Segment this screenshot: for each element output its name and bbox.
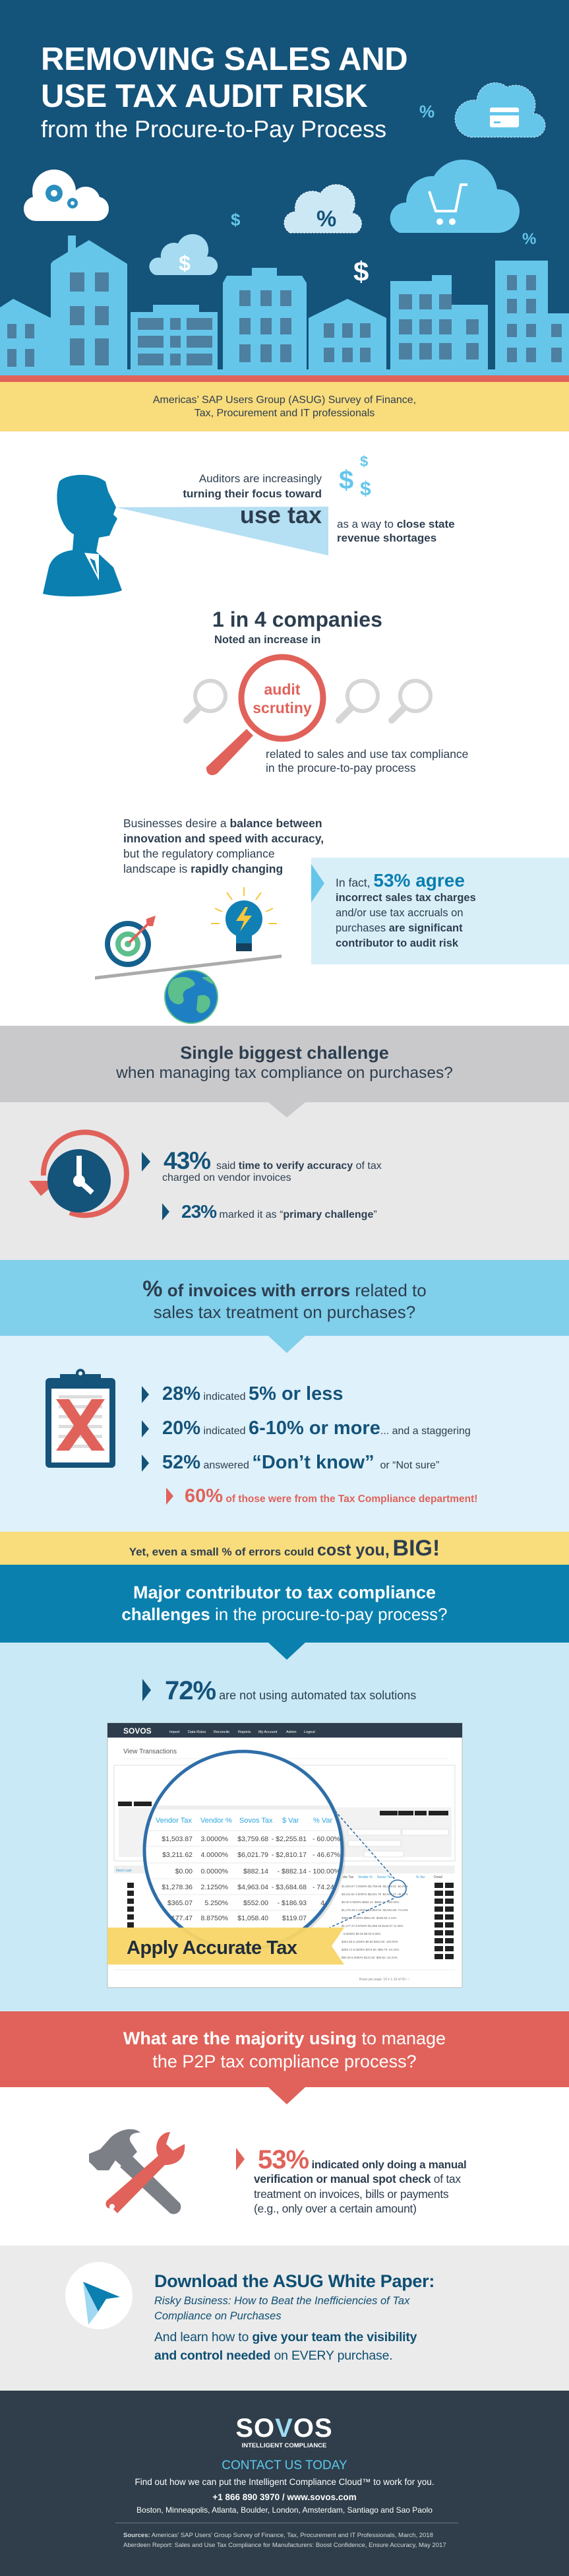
- panel: major contributor header: Major contributor to tax compliance: [133, 1583, 436, 1602]
- screenshot: Sovos view transactions: Detail: [434, 1875, 442, 1879]
- footer: [0, 2391, 569, 2576]
- icon: clouds and symbols: $: [231, 210, 241, 230]
- screenshot: Sovos view transactions: $1,177.47: [162, 1914, 193, 1922]
- screenshot: Sovos view transactions: Reconcile: [214, 1730, 229, 1734]
- screenshot: Sovos view transactions: $882.14: [243, 1868, 268, 1875]
- panel: major contributor header: [0, 1565, 569, 1643]
- panel: single biggest challenge header: [0, 1026, 569, 1102]
- screenshot: Sovos view transactions: $1,278.36: [162, 1883, 193, 1891]
- panel: single biggest challenge header: Single biggest challenge: [180, 1043, 389, 1063]
- survey band: [0, 382, 569, 431]
- text: businesses desire balance: but the regulatory compliance: [123, 847, 275, 860]
- icon: clouds and symbols: $: [179, 251, 191, 275]
- stat: 43%: charged on vendor invoices: [162, 1172, 291, 1183]
- survey band: Americas’ SAP Users Group (ASUG) Survey of Finance,: [153, 394, 416, 406]
- callout: 53% agree: incorrect sales tax charges: [336, 892, 476, 904]
- screenshot: Sovos view transactions: $3,759.68: [237, 1835, 268, 1843]
- screenshot: Sovos view transactions: % Var: [416, 1875, 425, 1879]
- screenshot: Sovos view transactions: dor Tax: [343, 1875, 354, 1879]
- screenshot: Sovos view transactions: $283.71 6.2500% $374.50 -$90.79 -24.24%: [342, 1948, 399, 1951]
- stat: 53% manual verification: 53% indicated only doing a manual: [258, 2145, 466, 2174]
- icon: clouds and symbols: $: [353, 256, 369, 287]
- screenshot: Sovos view transactions: $0.00 0.0000% $882.14 -$882.14 -100.00%: [342, 1901, 399, 1904]
- title: from the Procure-to-Pay Process: [41, 115, 386, 142]
- screenshot: Sovos view transactions: $1,503.87: [162, 1835, 193, 1843]
- icon: dollar signs: $: [360, 453, 368, 470]
- icon: clipboard with X: [45, 1369, 115, 1468]
- panel: invoice errors header: [0, 1260, 569, 1336]
- screenshot: Sovos view transactions: - $2,255.81: [272, 1835, 307, 1843]
- panel: challenge body: [0, 1102, 569, 1260]
- screenshot: Sovos view transactions: View Transactions: [123, 1748, 177, 1755]
- stat: 53% manual verification: (e.g., only over a certain amount): [254, 2202, 417, 2215]
- screenshot: Sovos view transactions: Sovos Tax: [377, 1875, 392, 1879]
- panel: download white paper: And learn how to give your team the visibility: [154, 2330, 417, 2344]
- screenshot: Sovos view transactions: - $882.14: [278, 1868, 307, 1875]
- callout: 53% agree: contributor to audit risk: [336, 937, 458, 949]
- text: related to sales and use tax: [266, 747, 468, 774]
- text: businesses desire balance: Businesses desire a balance between: [123, 817, 322, 830]
- panel: major contributor header: challenges in the procure-to-pay process?: [121, 1604, 448, 1624]
- title: USE TAX AUDIT RISK: [41, 79, 368, 114]
- list: error stats: 28% indicated 5% or less: [162, 1383, 343, 1404]
- icon: auditor silhouette with beam: [43, 475, 328, 596]
- text: related to sales and use tax: in the procure-to-pay process: [266, 761, 416, 774]
- icon: clock: [29, 1129, 129, 1218]
- sources: Aberdeen Report: Sales and Use Tax Compliance for Manufacturers: Boost Confidence, Ensure Accuracy, May 2017: [123, 2542, 446, 2549]
- list: error stats: 20% indicated 6-10% or more... and a staggering: [162, 1418, 471, 1439]
- red stripe: [0, 375, 569, 382]
- stat: 43%: 43% said time to verify accuracy of tax: [164, 1147, 382, 1174]
- screenshot: Sovos view transactions: $3,211.62 4.0000% $6,021.79 -$2,810.17 -46.67%: [342, 1893, 408, 1896]
- screenshot: Sovos view transactions: Vendor %: [200, 1817, 232, 1825]
- panel: majority using header: the P2P tax compliance process?: [152, 2052, 417, 2071]
- panel: majority using header: [0, 2011, 569, 2087]
- screenshot: Sovos view transactions: - $3,684.68: [272, 1883, 307, 1891]
- panel: download white paper: Compliance on Purchases: [154, 2310, 282, 2322]
- stat: 53% manual verification: treatment on invoices, bills or payments: [254, 2187, 448, 2201]
- panel: single biggest challenge header: when managing tax compliance on purchases?: [116, 1064, 453, 1082]
- stat: 43%: 23% marked it as “primary challenge”: [181, 1201, 377, 1222]
- callout: 53% agree: purchases are significant: [336, 922, 463, 934]
- icon: dollar signs: $: [339, 466, 353, 495]
- screenshot: Sovos view transactions: $119.07: [282, 1914, 307, 1922]
- text: related to sales and use tax: related to sales and use tax compliance: [266, 747, 468, 761]
- screenshot: Sovos view transactions: 11.25%: [317, 1914, 340, 1922]
- icon: audit scrutiny magnifiers: [183, 654, 433, 775]
- screenshot: Sovos view transactions: - 100.00%: [309, 1868, 340, 1875]
- screenshot: Sovos view transactions: 5.250%: [204, 1899, 228, 1907]
- stat: 53% manual verification: verification or manual spot check of tax: [254, 2172, 461, 2185]
- panel: download white paper: Risky Business: How to Beat the Inefficiencies of Tax: [154, 2295, 409, 2307]
- contact text: +1 866 890 3970 / www.sovos.com: [212, 2492, 357, 2502]
- contact text: Find out how we can put the Intelligent Compliance Cloud™ to work for you.: [135, 2477, 434, 2487]
- contact text: CONTACT US TODAY: [222, 2459, 347, 2472]
- text: auditors focus: [183, 472, 322, 528]
- screenshot: Sovos view transactions: - 60.00%: [313, 1835, 340, 1843]
- stat: 1 in 4 companies: 1 in 4 companies: [212, 608, 382, 631]
- screenshot: Sovos view transactions: $3,211.62: [162, 1851, 193, 1859]
- screenshot: Sovos view transactions: $ Var: [282, 1817, 299, 1825]
- banner: cost you big: Yet, even a small % of errors could cost you, BIG!: [129, 1536, 440, 1561]
- screenshot: Sovos view transactions: $4,963.04: [237, 1883, 268, 1891]
- panel: download white paper: and control needed on EVERY purchase.: [154, 2348, 392, 2363]
- text: businesses desire balance: innovation and speed with accuracy,: [123, 832, 324, 845]
- icon: clouds and symbols: %: [419, 102, 434, 121]
- screenshot: Sovos view transactions: Reports: [238, 1730, 251, 1734]
- text: auditors focus: Auditors are increasingly: [199, 472, 322, 485]
- title: REMOVING SALES AND: [41, 42, 407, 77]
- arrow: red header pointer: [268, 2087, 305, 2104]
- screenshot: Sovos view transactions: 2.1250%: [201, 1883, 228, 1891]
- screenshot: Sovos view transactions: Apply Accurate Tax: [127, 1937, 297, 1959]
- screenshot: Sovos view transactions: 4.41%: [320, 1899, 340, 1907]
- stat: 1 in 4 companies: Noted an increase in: [214, 634, 320, 646]
- screenshot: Sovos view transactions: $1,278.36 2.1250% $4,963.04 -$3,684.68 -74.24%: [342, 1908, 408, 1912]
- screenshot: Sovos view transactions: - $186.93: [278, 1899, 307, 1907]
- sources: [123, 2532, 446, 2549]
- screenshot: Sovos view transactions: 3.0000%: [201, 1835, 228, 1843]
- icon: clouds and symbols: %: [316, 206, 336, 232]
- icon: dollar signs: [339, 453, 371, 500]
- banner: cost you big: [0, 1532, 569, 1565]
- screenshot: Sovos view transactions: $92.29 6.2500% $121.82 -$29.53 -24.24%: [342, 1956, 398, 1959]
- survey band: Tax, Procurement and IT professionals: [195, 408, 374, 419]
- logo: sovos: INTELLIGENT COMPLIANCE: [242, 2442, 326, 2449]
- panel: invoice errors header: sales tax treatment on purchases?: [154, 1302, 415, 1322]
- screenshot: Sovos view transactions: Sovos Tax: [239, 1817, 273, 1825]
- stat: 72%: 72% are not using automated tax solutions: [165, 1676, 416, 1705]
- panel: majority using header: What are the majority using to manage: [123, 2028, 446, 2048]
- icon: cursor in circle: [65, 2262, 133, 2329]
- panel: automation body: [0, 1643, 569, 2011]
- title: [41, 42, 407, 142]
- screenshot: Sovos view transactions: $1,177.47 8.8750% $1,058.40 $119.07 11.25%: [342, 1924, 404, 1928]
- header background: [0, 0, 569, 382]
- text: close state revenue: revenue shortages: [337, 532, 436, 544]
- icon: clouds and symbols: [24, 82, 546, 287]
- screenshot: Sovos view transactions: $0.00: [175, 1868, 193, 1875]
- list: error stats: 52% answered “Don’t know” or “Not sure”: [162, 1452, 439, 1473]
- screenshot: Sovos view transactions: % Var: [313, 1817, 332, 1825]
- text: auditors focus: use tax: [240, 501, 322, 528]
- screenshot: Sovos view transactions: [107, 1723, 463, 1988]
- panel: download white paper: [0, 2246, 569, 2391]
- panel: invoice errors header: % of invoices with errors related to: [142, 1276, 427, 1302]
- screenshot: Sovos view transactions: - 0.0000% $0.00 $0.00 0.00%: [342, 1932, 381, 1935]
- stat: 53% manual verification: [236, 2145, 466, 2215]
- stat: 43%: [142, 1147, 382, 1222]
- panel: download white paper: Download the ASUG White Paper:: [154, 2271, 434, 2291]
- stat: 1 in 4 companies: [212, 608, 382, 646]
- list: error stats: 60% of those were from the Tax Compliance department!: [185, 1486, 477, 1507]
- screenshot: Sovos view transactions: $365.07 5.250% $552.00 -$186.93 4.41%: [342, 1916, 396, 1920]
- screenshot: Sovos view transactions: 4.0000%: [201, 1851, 228, 1859]
- logo: sovos: SOVOS: [235, 2414, 333, 2443]
- icon: audit scrutiny magnifiers: scrutiny: [253, 699, 312, 716]
- text: businesses desire balance: landscape is rapidly changing: [123, 862, 283, 875]
- screenshot: Sovos view transactions: - 46.67%: [313, 1851, 340, 1859]
- screenshot: Sovos view transactions: Rows per page: 10 ▾ 1-10 of 50 ‹ ›: [359, 1978, 409, 1982]
- sources: Sources: Americas' SAP Users' Group Survey of Finance, Tax, Procurement and IT Professionals, March, 2018: [123, 2532, 433, 2539]
- text: businesses desire balance: [123, 817, 324, 875]
- screenshot: Sovos view transactions: $365.07: [167, 1899, 193, 1907]
- buildings skyline: [0, 236, 569, 375]
- screenshot: Sovos view transactions: Import: [169, 1730, 180, 1734]
- text: auditors focus: turning their focus toward: [183, 487, 322, 500]
- screenshot: Sovos view transactions: Vendor Tax: [156, 1817, 192, 1825]
- icon: balance (target, bulb, globe): [95, 887, 282, 1024]
- text: close state revenue: [337, 518, 455, 544]
- screenshot: Sovos view transactions: Vendor %: [358, 1875, 373, 1879]
- screenshot: Sovos view transactions: - $2,810.17: [272, 1851, 307, 1859]
- screenshot: Sovos view transactions: - 74.24%: [313, 1883, 340, 1891]
- icon: hammer and wrench: [89, 2129, 185, 2214]
- icon: audit scrutiny magnifiers: audit: [264, 681, 301, 698]
- contact text: [135, 2459, 434, 2515]
- screenshot: Sovos view transactions: $1,503.87 3.0000% $3,759.68 -$2,255.81 -60.00%: [342, 1885, 408, 1888]
- callout: 53% agree: In fact, 53% agree: [336, 870, 465, 891]
- callout: 53% agree: and/or use tax accruals on: [336, 907, 464, 919]
- screenshot: Sovos view transactions: $1,058.40: [237, 1914, 268, 1922]
- screenshot: Sovos view transactions: $6,021.79: [237, 1851, 268, 1859]
- callout: 53% agree: [311, 858, 569, 964]
- icon: dollar signs: $: [360, 478, 371, 500]
- screenshot: Sovos view transactions: Admin: [286, 1730, 297, 1734]
- screenshot: Sovos view transactions: $552.00: [243, 1899, 268, 1907]
- screenshot: Sovos view transactions: SOVOS: [123, 1726, 152, 1736]
- screenshot: Sovos view transactions: 0.0000%: [201, 1868, 228, 1875]
- contact text: Boston, Minneapolis, Atlanta, Boulder, London, Amsterdam, Santiago and Sao Paolo: [136, 2505, 433, 2515]
- panel: invoice errors body: [0, 1336, 569, 1532]
- screenshot: Sovos view transactions: $344.93 5.1250% $0.00 $344.93 -100.00%: [342, 1940, 398, 1943]
- icon: clouds and symbols: %: [522, 230, 536, 248]
- screenshot: Sovos view transactions: Next Last: [116, 1869, 132, 1873]
- list: error stats: [142, 1383, 477, 1507]
- screenshot: Sovos view transactions: 8.8750%: [201, 1914, 228, 1922]
- screenshot: Sovos view transactions: Logout: [304, 1730, 315, 1734]
- screenshot: Sovos view transactions: My Account: [258, 1730, 278, 1734]
- text: close state revenue: as a way to close state: [337, 518, 455, 530]
- screenshot: Sovos view transactions: Data Rules: [188, 1730, 206, 1734]
